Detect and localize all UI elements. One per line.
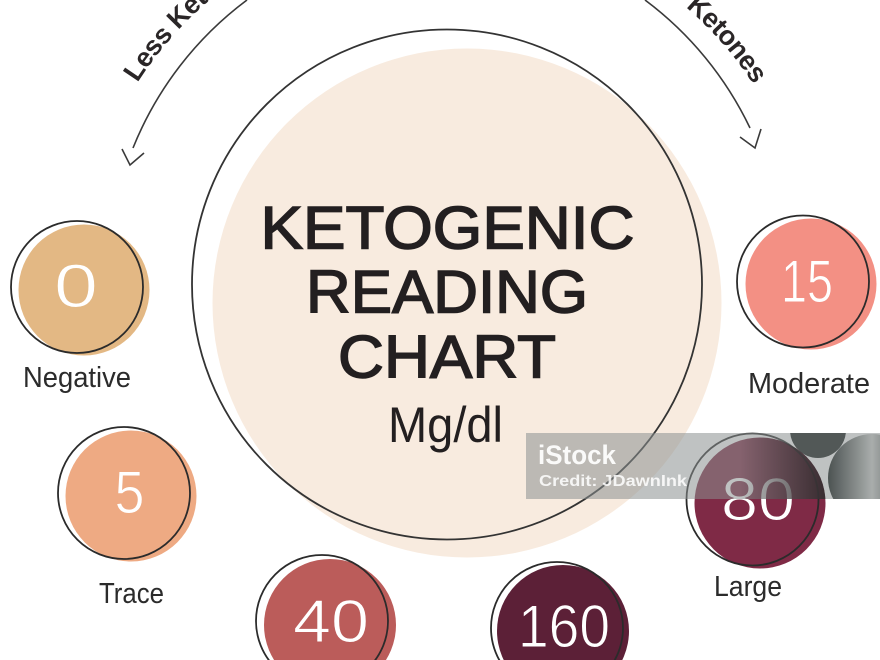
- title: KETOGENIC: [260, 194, 634, 262]
- reading: 0 negative: [11, 221, 150, 394]
- title: [260, 194, 634, 390]
- title: CHART: [338, 324, 556, 390]
- watermark credit: Credit: JDawnInk: [539, 473, 687, 490]
- reading: 80 large: [686, 434, 826, 603]
- arrow: less ketones: [122, 0, 247, 165]
- reading: 15 moderate: [737, 216, 876, 400]
- reading: 5 trace: 5: [114, 459, 144, 526]
- reading: 40: [256, 555, 396, 660]
- reading: 160: 160: [518, 593, 610, 660]
- reading: 5 trace: [58, 427, 196, 610]
- watermark band: [526, 433, 880, 499]
- reading: 80 large: Large: [714, 571, 782, 603]
- reading: 0 negative: Negative: [23, 362, 131, 394]
- arrow: more ketones: [645, 0, 761, 148]
- reading: 5 trace: Trace: [99, 578, 164, 610]
- title: READING: [306, 258, 588, 326]
- central cream circle: [212, 48, 722, 558]
- reading: 0 negative: 0: [54, 252, 98, 320]
- reading: 80 large: 80: [721, 466, 795, 533]
- reading: 160: [491, 562, 629, 660]
- reading: 15 moderate: 15: [781, 248, 833, 315]
- reading: 40: 40: [293, 588, 369, 655]
- watermark brand: iStock: [538, 440, 617, 470]
- central outline ring: [192, 30, 702, 540]
- reading: 15 moderate: Moderate: [748, 368, 870, 400]
- unit label: Mg/dl: [388, 397, 503, 453]
